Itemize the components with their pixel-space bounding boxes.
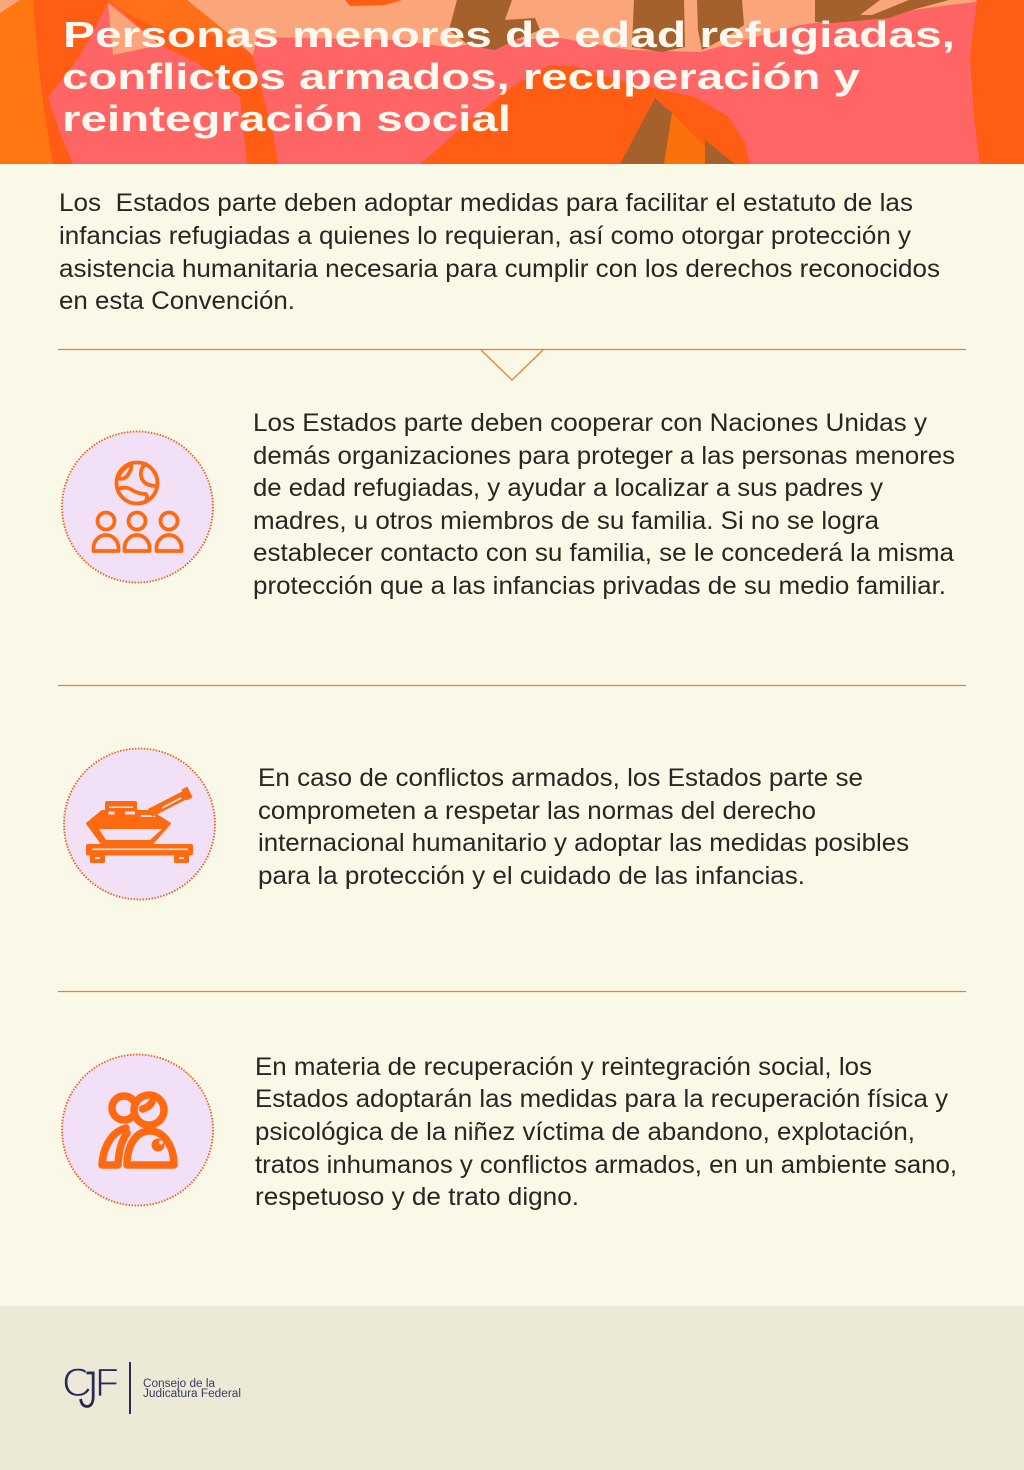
text: cooperation with the United Nations: establecer contacto con su familia, se le concederá la misma <box>253 539 954 567</box>
logo: Consejo de la Judicatura Federal: J <box>78 1360 98 1420</box>
logo: Consejo de la Judicatura Federal: Judicatura Federal <box>143 1388 241 1400</box>
text: cooperation with the United Nations: demás organizaciones para proteger a las personas menores <box>253 442 955 470</box>
title: Personas menores de edad refugiadas, <box>63 14 955 55</box>
icon: tank <box>64 748 215 900</box>
text: armed conflicts: En caso de conflictos armados, los Estados parte se <box>258 764 863 792</box>
title <box>62 14 955 139</box>
text: cooperation with the United Nations: de edad refugiadas, y ayudar a localizar a sus padres y <box>253 474 884 502</box>
title: reintegración social <box>62 98 511 139</box>
intro paragraph: asistencia humanitaria necesaria para cumplir con los derechos reconocidos <box>59 255 940 283</box>
text: cooperation with the United Nations: protección que a las infancias privadas de su medio familiar. <box>253 572 946 600</box>
footer band <box>0 1306 1024 1470</box>
text: cooperation with the United Nations: madres, u otros miembros de su familia. Si no se logra <box>253 507 879 535</box>
text: armed conflicts: internacional humanitario y adoptar las medidas posibles <box>258 829 909 857</box>
logo: Consejo de la Judicatura Federal: F <box>95 1361 119 1405</box>
text: armed conflicts <box>258 764 909 890</box>
text: recovery and reintegration: En materia de recuperación y reintegración social, los <box>255 1053 872 1081</box>
divider with chevron arrow <box>58 350 966 380</box>
logo: Consejo de la Judicatura Federal <box>62 1360 241 1420</box>
icon: globe and people <box>62 432 213 582</box>
icon: two children <box>62 1054 213 1206</box>
intro paragraph: Los Estados parte deben adoptar medidas para facilitar el estatuto de las <box>59 189 913 217</box>
text: armed conflicts: para la protección y el cuidado de las infancias. <box>258 862 805 890</box>
text: recovery and reintegration <box>255 1053 957 1211</box>
text: recovery and reintegration: tratos inhumanos y conflictos armados, en un ambiente sano, <box>255 1151 957 1179</box>
title: conflictos armados, recuperación y <box>62 56 860 97</box>
text: recovery and reintegration: psicológica de la niñez víctima de abandono, explotación, <box>255 1118 915 1146</box>
intro paragraph: en esta Convención. <box>59 287 295 315</box>
logo: Consejo de la Judicatura Federal: C <box>62 1361 92 1405</box>
text: armed conflicts: comprometen a respetar las normas del derecho <box>258 797 816 825</box>
logo: Consejo de la Judicatura Federal: Consejo de la <box>143 1378 216 1390</box>
text: cooperation with the United Nations: Los Estados parte deben cooperar con Naciones Unidas y <box>253 409 928 437</box>
intro paragraph: infancias refugiadas a quienes lo requieran, así como otorgar protección y <box>59 222 912 250</box>
header banner <box>0 0 1024 164</box>
intro paragraph <box>59 189 940 315</box>
text: recovery and reintegration: Estados adoptarán las medidas para la recuperación física y <box>255 1085 949 1113</box>
text: recovery and reintegration: respetuoso y de trato digno. <box>255 1183 579 1211</box>
text: cooperation with the United Nations <box>253 409 955 600</box>
